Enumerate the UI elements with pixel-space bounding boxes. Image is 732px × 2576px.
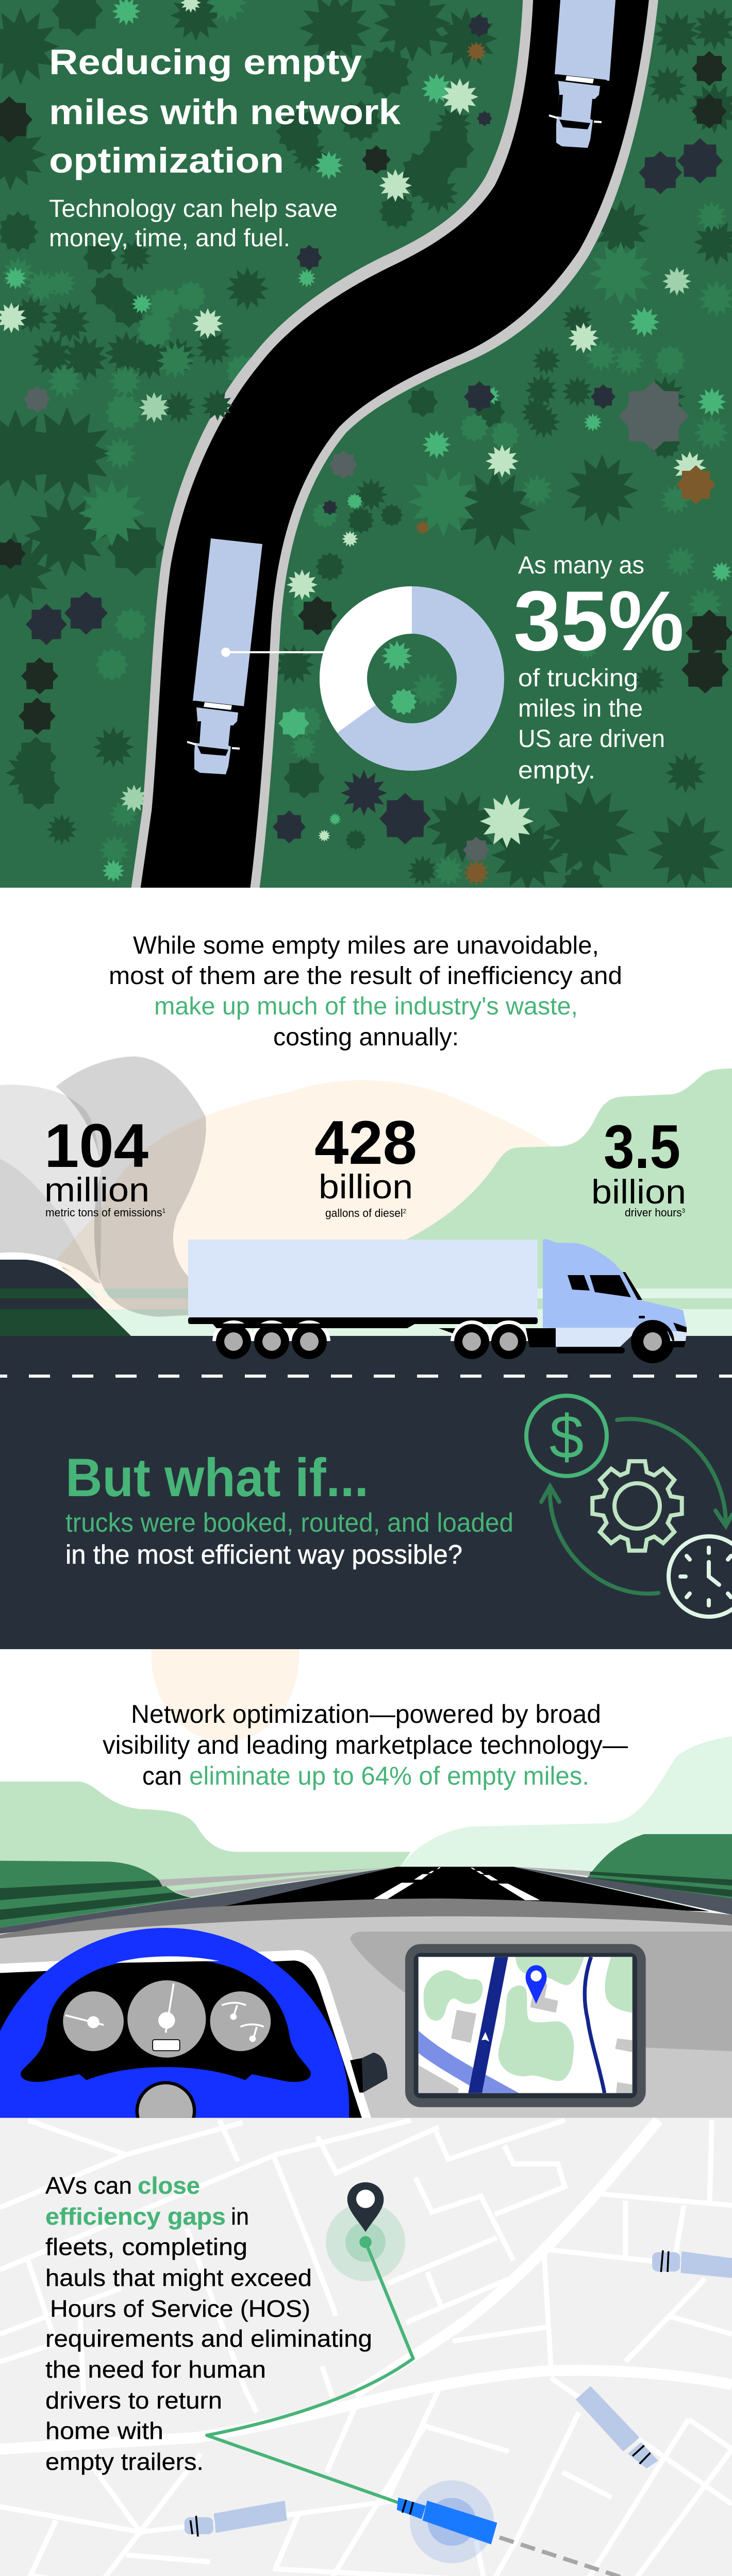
truck: top right xyxy=(652,2250,732,2278)
road xyxy=(0,1336,732,1649)
icon: optimization cycle xyxy=(526,1396,732,1617)
muted pale star trees xyxy=(120,267,691,812)
stat: 428 billion: gallons of diesel xyxy=(325,1207,407,1219)
callout: 35 percent: US are driven xyxy=(518,725,665,753)
stat: 104 million: 104 xyxy=(44,1111,148,1180)
location halo xyxy=(326,2203,405,2281)
text block: empty miles intro: While some empty miles are unavoidable, xyxy=(133,932,599,959)
sun xyxy=(152,1649,299,1741)
navy trees xyxy=(26,14,723,844)
gray trees xyxy=(24,381,689,863)
street grid xyxy=(0,2120,732,2576)
callout: 35 percent: 35% xyxy=(513,573,684,668)
hills xyxy=(0,1736,732,1906)
subtitle xyxy=(49,195,338,252)
panel: landscape with truck xyxy=(0,1056,732,1649)
green hill xyxy=(406,1069,732,1336)
hill halo xyxy=(0,1252,64,1272)
text block: AVs close efficiency gaps: efficiency gaps xyxy=(45,2203,226,2230)
panel: nav screen xyxy=(405,1944,646,2107)
icon: map pin xyxy=(347,2182,384,2232)
stat: 104 million xyxy=(44,1111,165,1219)
text block: AVs close efficiency gaps: Hours of Service (HOS) xyxy=(50,2295,310,2322)
heading: but what if xyxy=(65,1448,513,1570)
lane dashes xyxy=(0,1375,732,1378)
beige sun blob xyxy=(54,1080,619,1336)
title: Reducing empty xyxy=(49,42,362,82)
text block: AVs close efficiency gaps: hauls that might exceed xyxy=(45,2264,312,2291)
text block: empty miles intro: most of them are the result of inefficiency and xyxy=(109,962,622,990)
instrument hood xyxy=(0,1950,371,2118)
brown trees xyxy=(415,41,716,886)
mint bands xyxy=(77,1289,732,1336)
title: miles with network xyxy=(49,92,401,132)
stat: 104 million: metric tons of emissions xyxy=(45,1206,167,1219)
stat: 3.5 billion xyxy=(591,1112,686,1219)
text block: AVs close efficiency gaps xyxy=(45,2172,372,2475)
stat: 3.5 billion: 3.5 xyxy=(604,1112,680,1181)
text block: empty miles intro: costing annually: xyxy=(273,1024,459,1051)
truck: top xyxy=(549,0,615,148)
stalk xyxy=(350,2053,388,2093)
pale star trees xyxy=(0,0,706,848)
truck: bottom left xyxy=(185,2501,287,2536)
stat: 3.5 billion: billion xyxy=(591,1173,686,1211)
subtitle: money, time, and fuel. xyxy=(49,225,290,252)
dark hill xyxy=(0,1260,134,1336)
dash panel recess xyxy=(350,1931,732,2051)
near black trees xyxy=(0,51,732,735)
icon: clock xyxy=(669,1536,732,1617)
truck: right diagonal xyxy=(576,2386,658,2468)
text block: network optimization: eliminate up to 64% of empty miles. xyxy=(189,1761,589,1790)
text block: network optimization xyxy=(103,1700,628,1790)
text block: network optimization: visibility and leading marketplace technology— xyxy=(103,1731,628,1759)
title xyxy=(49,42,401,180)
stat: 3.5 billion: 3 xyxy=(682,1207,685,1214)
text block: AVs close efficiency gaps: the need for human xyxy=(45,2356,266,2383)
road xyxy=(131,0,658,891)
dark trees xyxy=(0,0,732,907)
truck: blue autonomous xyxy=(397,2498,497,2545)
heading: but what if: trucks were booked, routed, and loaded xyxy=(65,1508,513,1538)
gauges xyxy=(63,1980,271,2058)
destination dot xyxy=(359,2236,372,2248)
text block: AVs close efficiency gaps: close xyxy=(138,2172,200,2199)
steering wheel xyxy=(0,1928,349,2290)
stat: 428 billion xyxy=(314,1108,417,1219)
truck: bottom xyxy=(187,538,262,774)
callout: 35 percent: miles in the xyxy=(518,695,643,722)
arrow: clockwise bottom xyxy=(541,1486,658,1594)
heading: but what if: But what if... xyxy=(65,1448,369,1508)
callout: 35 percent: empty. xyxy=(518,757,595,784)
stat: 104 million: 1 xyxy=(162,1207,165,1214)
stat: 428 billion: 428 xyxy=(314,1108,417,1177)
text block: empty miles intro: make up much of the industry's waste, xyxy=(154,993,578,1020)
text block: AVs close efficiency gaps: empty trailers. xyxy=(45,2448,204,2475)
title: optimization xyxy=(49,141,284,180)
text block: AVs close efficiency gaps: AVs can xyxy=(45,2172,132,2199)
stat: 428 billion: 2 xyxy=(403,1208,406,1215)
truck: side view xyxy=(188,1239,687,1363)
truck halo xyxy=(410,2480,494,2563)
text block: AVs close efficiency gaps: home with xyxy=(45,2417,163,2444)
text block: network optimization: can xyxy=(142,1761,182,1790)
stat: 428 billion: billion xyxy=(319,1167,413,1206)
panel: route map xyxy=(0,2118,732,2576)
text block: empty miles intro xyxy=(109,932,622,1051)
road and dashboard view xyxy=(0,1834,732,1944)
panel: hero forest road xyxy=(0,0,732,907)
icon: dollar xyxy=(526,1396,607,1476)
smoke clouds xyxy=(0,1056,206,1317)
text block: AVs close efficiency gaps: fleets, completing xyxy=(45,2233,247,2260)
dashed path xyxy=(500,2537,649,2576)
trees over road edge xyxy=(210,393,233,421)
bright green trees xyxy=(4,0,732,882)
callout: 35 percent xyxy=(513,552,684,784)
stat: 3.5 billion: driver hours xyxy=(625,1206,685,1219)
heading: but what if: in the most efficient way possible? xyxy=(65,1540,462,1570)
callout: 35 percent: As many as xyxy=(518,552,644,579)
icon: gear xyxy=(592,1461,682,1551)
forest background xyxy=(0,0,732,888)
stat: 104 million: million xyxy=(44,1171,149,1209)
mid green trees xyxy=(2,0,732,886)
callout: 35 percent: of trucking xyxy=(518,665,638,692)
donut chart: 35 percent xyxy=(221,610,480,747)
panel: network optimization landscape xyxy=(0,1649,732,1944)
subtitle: Technology can help save xyxy=(49,195,338,223)
route line xyxy=(207,2242,413,2503)
text block: network optimization: Network optimization—powered by broad xyxy=(131,1700,601,1728)
icon: dollar: $ xyxy=(550,1402,584,1471)
text block: AVs close efficiency gaps: requirements and eliminating xyxy=(45,2325,372,2352)
arrow: clockwise top xyxy=(617,1419,732,1526)
panel: truck dashboard xyxy=(0,1917,732,2290)
text block: AVs close efficiency gaps: in xyxy=(231,2203,249,2230)
nav map xyxy=(419,1957,633,2093)
text block: AVs close efficiency gaps: drivers to return xyxy=(45,2387,222,2414)
